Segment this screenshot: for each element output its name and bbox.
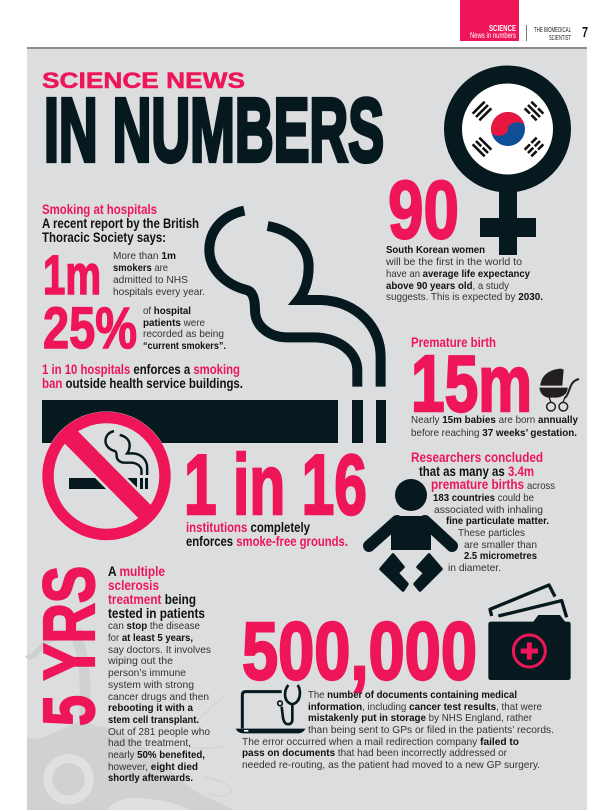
journal name and page number: THE BIOMEDICAL: [534, 25, 571, 34]
text: smoking at hospitals intro: Smoking at hospitals: [42, 202, 157, 218]
text: researchers concluded: premature births: [431, 477, 524, 493]
text: multiple sclerosis body: wiping out the: [107, 656, 173, 667]
text: institutions: institutions completely: [186, 520, 310, 536]
icon: no smoking sign: [42, 412, 171, 540]
journal name and page number: [526, 24, 588, 42]
text: 1m smokers: admitted to NHS: [113, 275, 188, 286]
text: 500,000 documents: The number of documents containing medical: [308, 690, 517, 701]
text: 1 in 10 hospitals: [42, 362, 243, 392]
text: multiple sclerosis body: stem cell transplant.: [108, 715, 199, 726]
text: smoking at hospitals intro: [42, 202, 199, 246]
text: 1m smokers: hospitals every year.: [113, 287, 205, 298]
icon: pram: [539, 369, 579, 411]
text: researchers concluded: Researchers concluded: [411, 450, 543, 466]
journal name and page number: 7: [582, 24, 588, 41]
journal name and page number: SCIENTIST: [549, 33, 571, 42]
text: 500,000 documents: The error occurred when a mail redirection company failed to: [242, 737, 519, 748]
text: 500,000 documents: mistakenly put in storage by NHS England, rather: [308, 713, 533, 724]
text: South Korean women: will be the first in the world to: [385, 257, 522, 268]
text: multiple sclerosis body: nearly 50% benefited,: [108, 750, 205, 761]
text: 15m babies: [411, 415, 578, 439]
text: 1 in 10 hospitals: ban outside health service buildings.: [42, 376, 243, 392]
text: multiple sclerosis body: can stop the disease: [108, 621, 200, 632]
text: multiple sclerosis heading: sclerosis: [108, 578, 159, 594]
text: smoking at hospitals intro: A recent report by the British: [42, 216, 199, 232]
text: hospital patients: patients were: [143, 318, 205, 329]
stat: 15m: 15m: [411, 339, 532, 428]
text: multiple sclerosis body: cancer drugs and then: [108, 692, 209, 703]
text: South Korean women: above 90 years old, a study: [386, 281, 510, 292]
text: multiple sclerosis heading: A multiple: [108, 564, 165, 580]
text: South Korean women: South Korean women: [386, 245, 485, 256]
icon: giant cigarette: [42, 400, 386, 443]
text: institutions: [186, 520, 348, 550]
text: multiple sclerosis body: for at least 5 years,: [108, 633, 193, 644]
text: researchers concluded: are smaller than: [464, 540, 537, 551]
text: multiple sclerosis body: had the treatment,: [108, 738, 191, 749]
text: multiple sclerosis body: say doctors. It involves: [108, 645, 211, 656]
text: researchers concluded: across: [527, 481, 555, 492]
text: researchers concluded: in diameter.: [448, 563, 501, 574]
text: 1 in 10 hospitals: 1 in 10 hospitals enforces a smoking: [42, 362, 240, 378]
header tab: News in numbers: [470, 31, 516, 40]
stat: 5 YRS: 5 YRS: [30, 566, 110, 726]
icon: female symbol with South Korean flag: [453, 74, 562, 255]
text: South Korean women: [385, 245, 543, 303]
text: 1m smokers: smokers are: [113, 263, 168, 274]
stat: 25%: 25%: [43, 296, 137, 361]
text: South Korean women: suggests. This is expected by 2030.: [386, 292, 543, 303]
text: South Korean women: have an average life expectancy: [386, 269, 530, 280]
background virus illustration: [27, 630, 234, 810]
text: 500,000 documents: information, including cancer test results, that were: [308, 702, 542, 713]
text: multiple sclerosis body: Out of 281 people who: [108, 727, 210, 738]
heading: premature birth: Premature birth: [411, 335, 496, 351]
text: hospital patients: “current smokers”.: [143, 341, 226, 352]
icon: baby: [369, 479, 452, 590]
text: researchers concluded: associated with inhaling: [434, 505, 543, 516]
text: researchers concluded: [411, 450, 555, 574]
text: researchers concluded: 2.5 micrometres: [464, 551, 537, 562]
text: 500,000 documents: pass on documents that had been incorrectly addressed or: [242, 748, 508, 759]
icon: giant cigarette smoke: [209, 211, 381, 387]
text: multiple sclerosis heading: [108, 564, 205, 622]
stat: 1 in 16: 1 in 16: [184, 438, 367, 533]
text: multiple sclerosis body: [107, 621, 211, 784]
text: 1m smokers: More than 1m: [113, 251, 176, 262]
text: researchers concluded: These particles: [458, 528, 525, 539]
text: multiple sclerosis body: person’s immune: [108, 668, 186, 679]
text: 500,000 documents: than being sent to GPs or filed in the patients’ records.: [308, 725, 554, 736]
title: SCIENCE NEWS: [42, 68, 245, 93]
text: multiple sclerosis heading: treatment being: [108, 592, 196, 608]
icon: laptop with stethoscope: [236, 685, 305, 733]
text: multiple sclerosis body: shortly afterwards.: [108, 773, 193, 784]
text: 500,000 documents: [242, 690, 554, 771]
text: researchers concluded: 183 countries could be: [433, 493, 534, 504]
text: 15m babies: Nearly 15m babies are born annually: [411, 415, 578, 426]
text: hospital patients: of hospital: [143, 306, 191, 317]
stat: 500,000: 500,000: [242, 606, 477, 697]
header tab: SCIENCE: [489, 24, 517, 33]
text: researchers concluded: that as many as 3.4m: [419, 464, 534, 480]
text: 1m smokers: [113, 251, 205, 298]
text: hospital patients: [143, 306, 226, 352]
stat: 90: 90: [388, 163, 459, 256]
text: researchers concluded: fine particulate matter.: [446, 516, 549, 527]
text: 15m babies: before reaching 37 weeks’ gestation.: [411, 428, 577, 439]
text: multiple sclerosis body: system with strong: [108, 680, 194, 691]
text: multiple sclerosis body: however, eight died: [108, 762, 198, 773]
icon: medical folder: [488, 585, 571, 680]
text: multiple sclerosis heading: tested in patients: [108, 606, 205, 622]
text: smoking at hospitals intro: Thoracic Society says:: [42, 230, 166, 246]
title: IN NUMBERS: [44, 81, 384, 181]
header tab: [460, 0, 519, 41]
title: [42, 68, 384, 181]
text: institutions: enforces smoke-free grounds.: [186, 534, 348, 550]
stat: 1m: 1m: [43, 243, 101, 306]
text: multiple sclerosis body: rebooting it with a: [108, 703, 193, 714]
text: 500,000 documents: needed re-routing, as the patient had moved to a new GP surgery.: [242, 760, 540, 771]
text: hospital patients: recorded as being: [143, 329, 224, 340]
